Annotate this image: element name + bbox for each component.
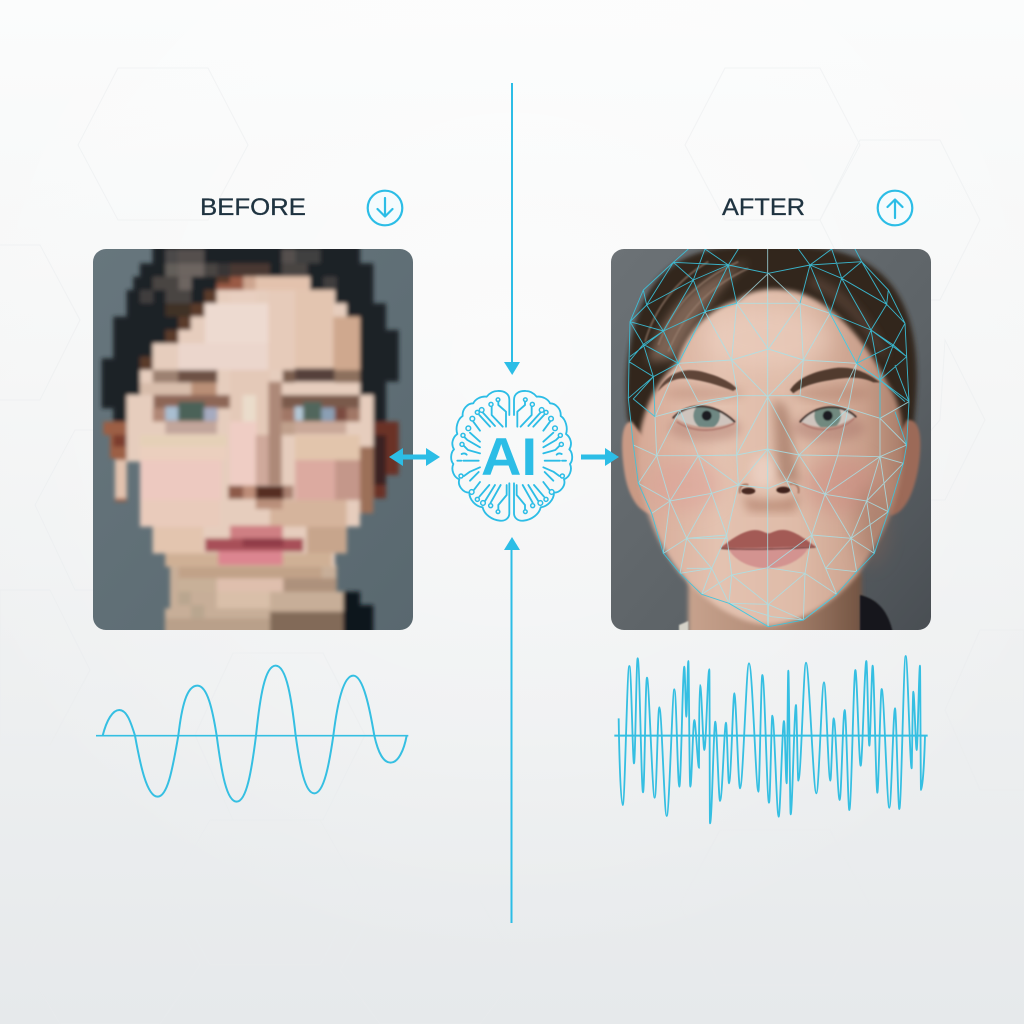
forehead tones xyxy=(205,303,272,343)
nose xyxy=(230,370,270,435)
ears xyxy=(103,422,127,502)
eyebrows xyxy=(658,370,737,392)
neck xyxy=(688,572,862,635)
axis: bottom vertical arrow into AI xyxy=(504,537,520,923)
panel: blurred pixelated face (before) xyxy=(93,245,413,635)
cheeks xyxy=(662,462,720,508)
left eye xyxy=(673,402,734,430)
eye sockets xyxy=(668,415,742,442)
icon: AI circuit brain xyxy=(451,391,572,521)
shoulder xyxy=(343,592,373,635)
neck xyxy=(165,565,353,635)
axis: top vertical arrow into AI xyxy=(504,83,520,375)
left hemisphere xyxy=(451,391,509,521)
right eye xyxy=(800,402,856,430)
chart: dense high-detail waveform (after) xyxy=(614,656,928,823)
panel: sharp portrait with face mesh (after) xyxy=(611,245,931,635)
icon: down arrow in circle xyxy=(368,191,402,225)
icon: up arrow in circle xyxy=(878,191,912,225)
arrow: double-headed, before to AI xyxy=(389,448,440,466)
heading: AFTER: AFTER xyxy=(722,194,805,221)
lips xyxy=(230,526,283,538)
nostrils xyxy=(741,488,755,494)
heading: BEFORE: BEFORE xyxy=(200,194,306,221)
arrow: AI to after xyxy=(581,448,619,466)
right eye xyxy=(295,407,303,421)
eyebrows xyxy=(153,370,178,383)
chart: smooth low-detail waveform (before) xyxy=(96,666,408,802)
hair xyxy=(626,245,917,452)
face xyxy=(638,289,904,625)
lips xyxy=(721,530,816,568)
ears xyxy=(622,422,655,514)
hair mass xyxy=(98,249,402,424)
left eye xyxy=(165,407,179,421)
nose shading xyxy=(773,401,800,485)
shoulder and collar xyxy=(860,595,893,635)
face mesh xyxy=(628,249,909,627)
face skin xyxy=(127,277,373,578)
right hemisphere xyxy=(514,391,572,521)
AI label: AI xyxy=(481,428,537,487)
eye sockets xyxy=(138,382,192,396)
cheek and jaw tones xyxy=(140,435,227,447)
